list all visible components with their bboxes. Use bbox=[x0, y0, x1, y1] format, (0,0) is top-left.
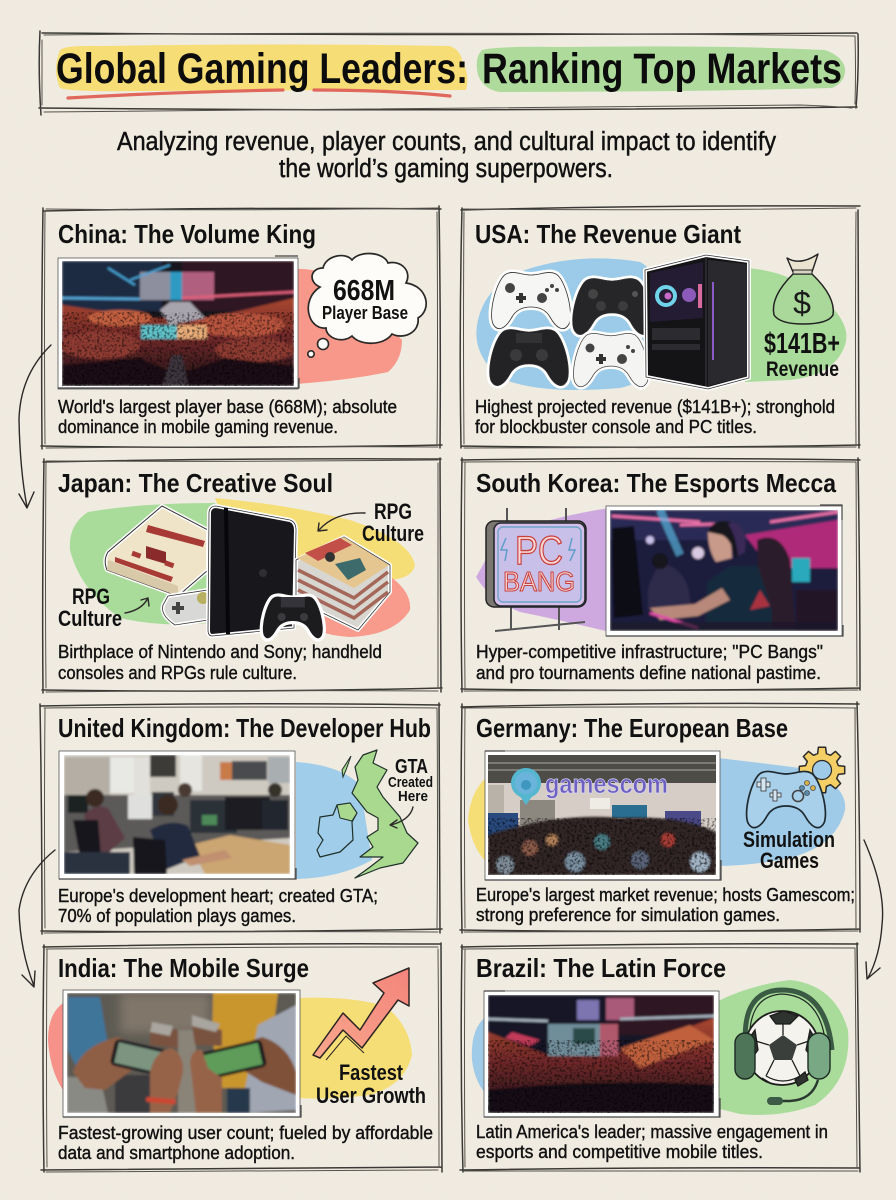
description bbox=[476, 884, 855, 925]
heading: South Korea: The Esports Mecca bbox=[476, 468, 836, 498]
icon: growth arrow bbox=[313, 968, 409, 1060]
colour blob: blue bbox=[718, 758, 845, 866]
panel: Germany bbox=[460, 702, 860, 933]
heading: Japan: The Creative Soul bbox=[58, 468, 333, 498]
label: fastest user growth: User Growth bbox=[316, 1083, 426, 1108]
photo: esports arena bbox=[58, 256, 299, 389]
description bbox=[58, 641, 382, 683]
description: World's largest player base (668M); absolute bbox=[58, 396, 397, 417]
description bbox=[476, 1121, 828, 1162]
highlight: green bbox=[477, 46, 845, 92]
icon: money bag bbox=[773, 254, 833, 324]
description: dominance in mobile gaming revenue. bbox=[58, 416, 338, 437]
label: RPG culture top: Culture bbox=[362, 521, 424, 546]
stat value: 668M bbox=[333, 275, 395, 307]
colour blob: purple bbox=[476, 508, 610, 632]
colour blob: red bbox=[310, 573, 410, 637]
description: and pro tournaments define national pastime. bbox=[476, 662, 821, 683]
colour blob: red bbox=[48, 1000, 68, 1097]
colour blob: blue bbox=[476, 258, 661, 390]
colour blob: yellow bbox=[297, 998, 412, 1099]
heading: Global Gaming Leaders: bbox=[56, 45, 468, 93]
highlight: yellow bbox=[56, 44, 467, 91]
panel: Brazil bbox=[460, 943, 860, 1172]
heading: United Kingdom: The Developer Hub bbox=[58, 713, 431, 743]
photo: latin arena bbox=[484, 991, 720, 1117]
gear hole bbox=[812, 760, 832, 780]
callout: GTA created here: GTA bbox=[395, 756, 428, 778]
label: RPG culture bottom: RPG bbox=[72, 584, 110, 609]
label: fastest user growth: Fastest bbox=[339, 1060, 404, 1085]
icon: white controller top left bbox=[492, 272, 570, 329]
subtitle: Analyzing revenue, player counts, and cultural impact to identify bbox=[117, 128, 776, 156]
label: RPG culture top bbox=[362, 499, 424, 546]
description bbox=[58, 885, 378, 926]
heading: India: The Mobile Surge bbox=[58, 953, 309, 983]
icon: gaming PC tower bbox=[645, 255, 749, 389]
stat value: $141B+ bbox=[764, 328, 840, 360]
callout: thought cloud bbox=[308, 254, 426, 357]
stat label: Player Base bbox=[322, 303, 408, 323]
description: Birthplace of Nintendo and Sony; handheld bbox=[58, 641, 382, 662]
description: consoles and RPGs rule culture. bbox=[58, 662, 297, 683]
panel: India bbox=[41, 943, 442, 1172]
label: fastest user growth bbox=[316, 1060, 426, 1108]
icon: money bag: $ bbox=[793, 285, 811, 321]
arrow: bottom label to console bbox=[125, 598, 149, 613]
icon: football headset bbox=[735, 990, 832, 1105]
icon: black controller bottom left bbox=[490, 329, 568, 386]
thought bubble dots bbox=[308, 338, 328, 357]
icon: DualShock controller bbox=[261, 595, 324, 640]
description bbox=[475, 396, 835, 437]
panel: South Korea bbox=[461, 458, 860, 692]
label: simulation games: Games bbox=[760, 848, 819, 873]
description: Latin America's leader; massive engagement in bbox=[476, 1121, 828, 1142]
colour blob: blue bbox=[296, 762, 372, 879]
description bbox=[58, 396, 397, 437]
heading: Germany: The European Base bbox=[476, 713, 788, 743]
icon: PC Bang sign bbox=[486, 508, 586, 631]
icon: retro gamepad bbox=[162, 590, 209, 625]
icon: manga stack bbox=[296, 537, 390, 630]
title banner bbox=[39, 31, 858, 115]
photo: developer office bbox=[59, 751, 296, 879]
description: esports and competitive mobile titles. bbox=[476, 1141, 763, 1162]
panel: USA bbox=[460, 206, 860, 448]
sign word PC: PC bbox=[515, 529, 563, 573]
colour blob: yellow bbox=[215, 498, 415, 580]
icon: PlayStation console bbox=[208, 506, 296, 636]
heading: Brazil: The Latin Force bbox=[476, 953, 726, 983]
description: data and smartphone adoption. bbox=[58, 1142, 295, 1163]
label: RPG culture bottom: Culture bbox=[58, 606, 122, 631]
callout: GTA created here bbox=[388, 756, 433, 805]
panel: China bbox=[41, 206, 442, 449]
arrow: top label to manga bbox=[318, 513, 365, 531]
label: simulation games bbox=[743, 827, 835, 873]
map: UK and Ireland bbox=[317, 750, 418, 878]
description: Fastest-growing user count; fueled by affordable bbox=[58, 1122, 433, 1143]
colour blob: green bbox=[716, 980, 848, 1115]
arrow: Germany to Brazil bbox=[864, 840, 883, 979]
colour blob: blue bbox=[472, 1014, 490, 1098]
description: strong preference for simulation games. bbox=[476, 904, 780, 925]
icon: blue controller bbox=[747, 771, 825, 828]
colour blob: yellow bbox=[468, 774, 490, 866]
photo: esports player bbox=[606, 505, 843, 636]
callout: GTA created here: Here bbox=[398, 789, 428, 805]
subtitle bbox=[117, 128, 776, 183]
icon: gear bbox=[799, 747, 845, 793]
panel: United Kingdom bbox=[40, 703, 442, 934]
colour blob: green bbox=[745, 268, 846, 382]
label: RPG culture bottom bbox=[58, 584, 122, 631]
colour blob: red bbox=[296, 269, 402, 384]
description: Europe's largest market revenue; hosts Gamescom; bbox=[476, 884, 855, 905]
sign word BANG: BANG bbox=[503, 566, 575, 597]
colour blob: green bbox=[70, 503, 230, 625]
underline: red strokes bbox=[68, 90, 450, 98]
arrow: UK to India bbox=[19, 850, 55, 987]
icon: black controller top right bbox=[573, 278, 651, 335]
description bbox=[58, 1122, 433, 1163]
description: 70% of population plays games. bbox=[58, 905, 296, 926]
icon: white controller bottom right bbox=[573, 333, 648, 387]
label: simulation games: Simulation bbox=[743, 827, 835, 852]
description: for blockbuster console and PC titles. bbox=[475, 416, 757, 437]
stat label: Revenue bbox=[766, 358, 839, 381]
arrow: China to Japan bbox=[19, 345, 51, 508]
photo: gamescom crowd bbox=[485, 751, 721, 880]
gamescom logo pin bbox=[513, 770, 539, 805]
description: Hyper-competitive infrastructure; "PC Bangs" bbox=[476, 641, 823, 662]
description: Europe's development heart; created GTA; bbox=[58, 885, 378, 906]
photo: mobile gamers bbox=[63, 990, 301, 1117]
icon: retro console bbox=[105, 506, 208, 596]
label: RPG culture top: RPG bbox=[374, 499, 412, 524]
hands behind phones bbox=[73, 1037, 133, 1090]
heading: China: The Volume King bbox=[58, 219, 316, 249]
description bbox=[476, 641, 823, 683]
callout: GTA created here: Created bbox=[388, 775, 433, 791]
description: Highest projected revenue ($141B+); stronghold bbox=[475, 396, 835, 417]
subtitle: the world’s gaming superpowers. bbox=[279, 155, 613, 183]
gamescom logotype: gamescom bbox=[545, 769, 668, 799]
panel: Japan bbox=[42, 458, 442, 693]
arrow: GTA to map bbox=[390, 807, 413, 828]
heading: USA: The Revenue Giant bbox=[475, 219, 741, 249]
